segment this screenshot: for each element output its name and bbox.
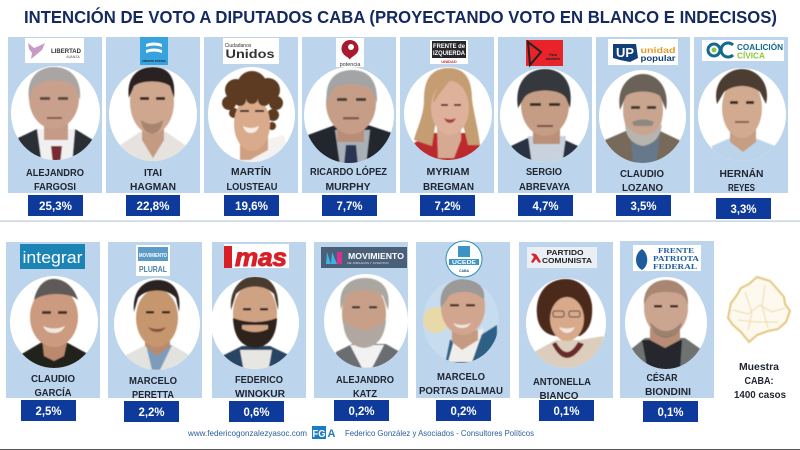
name: Alejandro Fargosi [26,168,84,193]
logo: UCEDE CABA: UCEDE [452,260,476,266]
name: Alejandro Fargosi: ALEJANDRO [26,168,84,179]
logo: Unidad Popular [608,39,678,65]
name: César Biondini [645,371,691,398]
photo: Alejandro Fargosi [11,66,100,165]
percent: 2,2%: 2,2% [138,405,165,419]
name: Martín Lousteau: LOUSTEAU [226,182,278,193]
logo: UCEDE CABA: CABA [459,269,470,273]
logo: La Libertad Avanza: LIBERTAD [51,49,82,55]
percent: 22,8%: 22,8% [136,199,170,213]
percent: 7,2% [420,195,475,216]
logo: Para Adelante: Adelante [546,57,560,61]
photo: Antonella Bianco [526,278,606,370]
logo: Ciudadanos Unidos: Ciudadanos [225,43,252,49]
name: Martín Lousteau [226,165,278,193]
logo: Movimiento Plural: PLURAL [139,265,167,274]
percent: 7,2%: 7,2% [434,199,461,213]
photo: Sergio Abrevaya [500,68,589,165]
percent: 4,7% [518,195,573,216]
name: Itai Hagman: ITAI [144,168,162,179]
logo: UCEDE CABA [446,241,482,277]
logo: Para Adelante: Para [549,53,557,57]
photo: Federico Winokur [211,276,299,372]
name: Hernán Reyes: HERNÁN [720,167,764,180]
percent: 0,6% [229,401,284,422]
logo: Nuevo MAS: mas [235,244,287,272]
percent: 0,2% [436,400,491,421]
percent: 3,3%: 3,3% [730,202,757,216]
name: Alejandro Fargosi: FARGOSI [34,182,76,193]
percent: 0,1% [643,401,698,422]
percent: 3,5%: 3,5% [630,199,657,213]
name: Claudio García: CLAUDIO [31,374,75,385]
name: Myriam Bregman: BREGMAN [423,182,474,193]
logo: Movimiento de Jubilados y Juventud [321,247,407,268]
name: Ricardo López Murphy: RICARDO LÓPEZ [310,165,387,178]
percent: 22,8% [126,195,180,216]
name: César Biondini: CÉSAR [646,371,678,384]
percent: 0,1%: 0,1% [658,405,684,419]
percent: 19,6% [224,195,279,216]
name: Federico Winokur: WINOKUR [235,389,286,400]
percent: 0,1%: 0,1% [554,404,580,418]
logo: Coalición Cívica: COALICIÓN [737,43,783,52]
candidate card: Federico Winokur [211,242,306,422]
logo: Movimiento de Jubilados y Juventud: MOVIMIENTO [348,252,404,261]
name: Claudio Lozano [620,169,664,194]
logo: Unidad Popular: popular [640,54,676,63]
name: Marcelo Portas Dalmau [419,372,503,397]
candidate card: Alejandro Fargosi [8,37,102,216]
logo: Unidad Popular: UP [616,45,634,60]
logo: Para Adelante [526,40,563,66]
text: sample size: Muestra [739,362,779,373]
logo: Partido Comunista: COMUNISTA [542,258,592,265]
name: Marcelo Portas Dalmau: MARCELO [437,372,485,383]
name: Sergio Abrevaya: ABREVAYA [519,182,571,193]
photo: Itai Hagman [109,67,197,165]
name: Myriam Bregman [423,167,474,193]
text: sample size [734,362,786,401]
logo: Frente de Izquierda [430,40,468,64]
name: Claudio García: GARCÍA [34,386,72,399]
logo: Frente de Izquierda: IZQUIERDA [433,51,466,57]
candidate card: Martín Lousteau [204,37,298,216]
footer: source credits: FG [312,429,326,440]
percent: 2,5% [21,400,76,421]
candidate card: Marcelo Portas Dalmau [416,241,510,421]
logo: Partido Comunista [527,247,597,268]
candidate card: Marcelo Peretta [108,242,202,422]
logo: Potencia [336,38,364,68]
footer: source credits: www.federicogonzalezyasoc.com [187,428,307,438]
name: Claudio Lozano: LOZANO [622,183,663,194]
name: Claudio Lozano: CLAUDIO [620,169,664,180]
name: Antonella Bianco: ANTONELLA [533,377,592,388]
name: Hernán Reyes: REYES [728,183,755,194]
photo: César Biondini [625,277,707,372]
name: Alejandro Katz [336,375,394,400]
name: Marcelo Peretta: PERETTA [132,390,175,401]
photo: Hernán Reyes [698,68,786,165]
percent: 4,7%: 4,7% [532,199,559,213]
name: Sergio Abrevaya: SERGIO [526,167,562,178]
logo: Potencia: potencia [340,62,361,68]
logo: Frente Patriota Federal [633,245,701,271]
percent: 0,2%: 0,2% [348,404,375,418]
logo: Integrar: integrar [22,248,83,267]
name: Marcelo Peretta [129,376,177,401]
logo: Ciudadanos Unidos [223,38,279,64]
percent: 3,5% [616,195,671,216]
logo: Movimiento Plural: MOVIMIENTO [139,253,167,259]
percent: 25,3%: 25,3% [39,199,72,213]
candidate card: Itai Hagman [106,37,200,216]
name: Alejandro Katz: ALEJANDRO [336,375,394,386]
percent: 2,2% [124,401,179,422]
photo: Ricardo López Murphy [304,67,394,165]
name: Itai Hagman: HAGMAN [130,182,176,193]
name: Alejandro Katz: KATZ [353,389,377,400]
photo: Claudio Lozano [599,70,686,168]
percent: 7,7%: 7,7% [336,199,363,213]
logo: Movimiento de Jubilados y Juventud: DE JUBILADOS Y JUVENTUD [347,261,389,265]
percent: 25,3% [28,195,83,216]
candidate card: Claudio García [6,242,100,421]
percent: 2,5%: 2,5% [36,404,62,418]
title: INTENCIÓN DE VOTO A DIPUTADOS CABA (PROYECTANDO VOTO EN BLANCO E INDECISOS) [24,6,777,27]
footer: source credits [187,426,534,440]
name: Itai Hagman [130,168,176,193]
logo: Coalición Cívica [702,40,784,61]
percent: 0,1% [539,400,594,421]
candidate card: Myriam Bregman [400,37,494,216]
name: Ricardo López Murphy [310,165,387,193]
logo: Unidad Popular: unidad [640,46,676,55]
name: Antonella Bianco: BIANCO [540,391,579,402]
candidate card: Alejandro Katz [314,242,408,421]
logo: Frente Patriota Federal: PATRIOTA [653,254,700,263]
name: Marcelo Portas Dalmau: PORTAS DALMAU [419,386,503,397]
logo: La Libertad Avanza [25,38,84,63]
logo: Coalición Cívica: CÍVICA [737,52,765,60]
logo: La Libertad Avanza: AVANZA [66,55,80,59]
candidate card: César Biondini [620,241,714,422]
footer: source credits: Federico González y Asociados - Consultores Políticos [345,428,534,438]
percent: 0,2% [334,400,389,421]
footer: source credits: A [328,428,336,440]
candidate card: Antonella Bianco [519,242,613,421]
logo: Frente Patria: FRENTE PATRIA [142,59,167,63]
text: sample size: 1400 casos [734,390,786,401]
percent: 19,6%: 19,6% [235,199,268,213]
name: Ricardo López Murphy: MURPHY [326,182,371,193]
name: Federico Winokur [235,375,286,400]
icon: map of CABA [728,277,790,342]
photo: Myriam Bregman [404,67,492,165]
photo: Marcelo Portas Dalmau [423,279,499,365]
candidate card: Sergio Abrevaya [498,37,592,216]
candidate card: Ricardo López Murphy [302,37,396,216]
candidate card: Hernán Reyes [694,37,788,219]
percent: 0,2%: 0,2% [450,404,477,418]
percent: 7,7% [322,195,377,216]
logo: Frente de Izquierda: UNIDAD [441,59,457,64]
logo: Ciudadanos Unidos: Unidos [226,47,275,61]
candidate card: Claudio Lozano [596,37,690,216]
logo: Integrar [20,244,85,269]
name: Antonella Bianco [533,377,592,402]
text: sample size: CABA: [744,376,774,387]
name: César Biondini: BIONDINI [645,387,691,398]
photo: Marcelo Peretta [114,278,200,372]
percent: 3,3% [716,198,771,219]
logo: Frente Patria [140,37,168,65]
name: Hernán Reyes [720,167,764,194]
name: Marcelo Peretta: MARCELO [129,376,177,387]
photo: Martín Lousteau [208,67,295,165]
logo: Frente de Izquierda: FRENTE de [433,44,466,50]
name: Martín Lousteau: MARTÍN [231,165,271,178]
logo: Movimiento Plural [136,245,170,276]
name: Myriam Bregman: MYRIAM [426,167,470,178]
name: Sergio Abrevaya [519,167,571,193]
logo: Partido Comunista: PARTIDO [546,250,584,257]
photo: Alejandro Katz [324,274,408,370]
name: Claudio García [31,374,75,399]
percent: 0,6%: 0,6% [244,405,270,419]
logo: Frente Patriota Federal: FEDERAL [653,262,697,271]
name: Federico Winokur: FEDERICO [235,375,283,386]
photo: Claudio García [10,276,98,370]
logo: Frente Patriota Federal: FRENTE [658,246,694,255]
